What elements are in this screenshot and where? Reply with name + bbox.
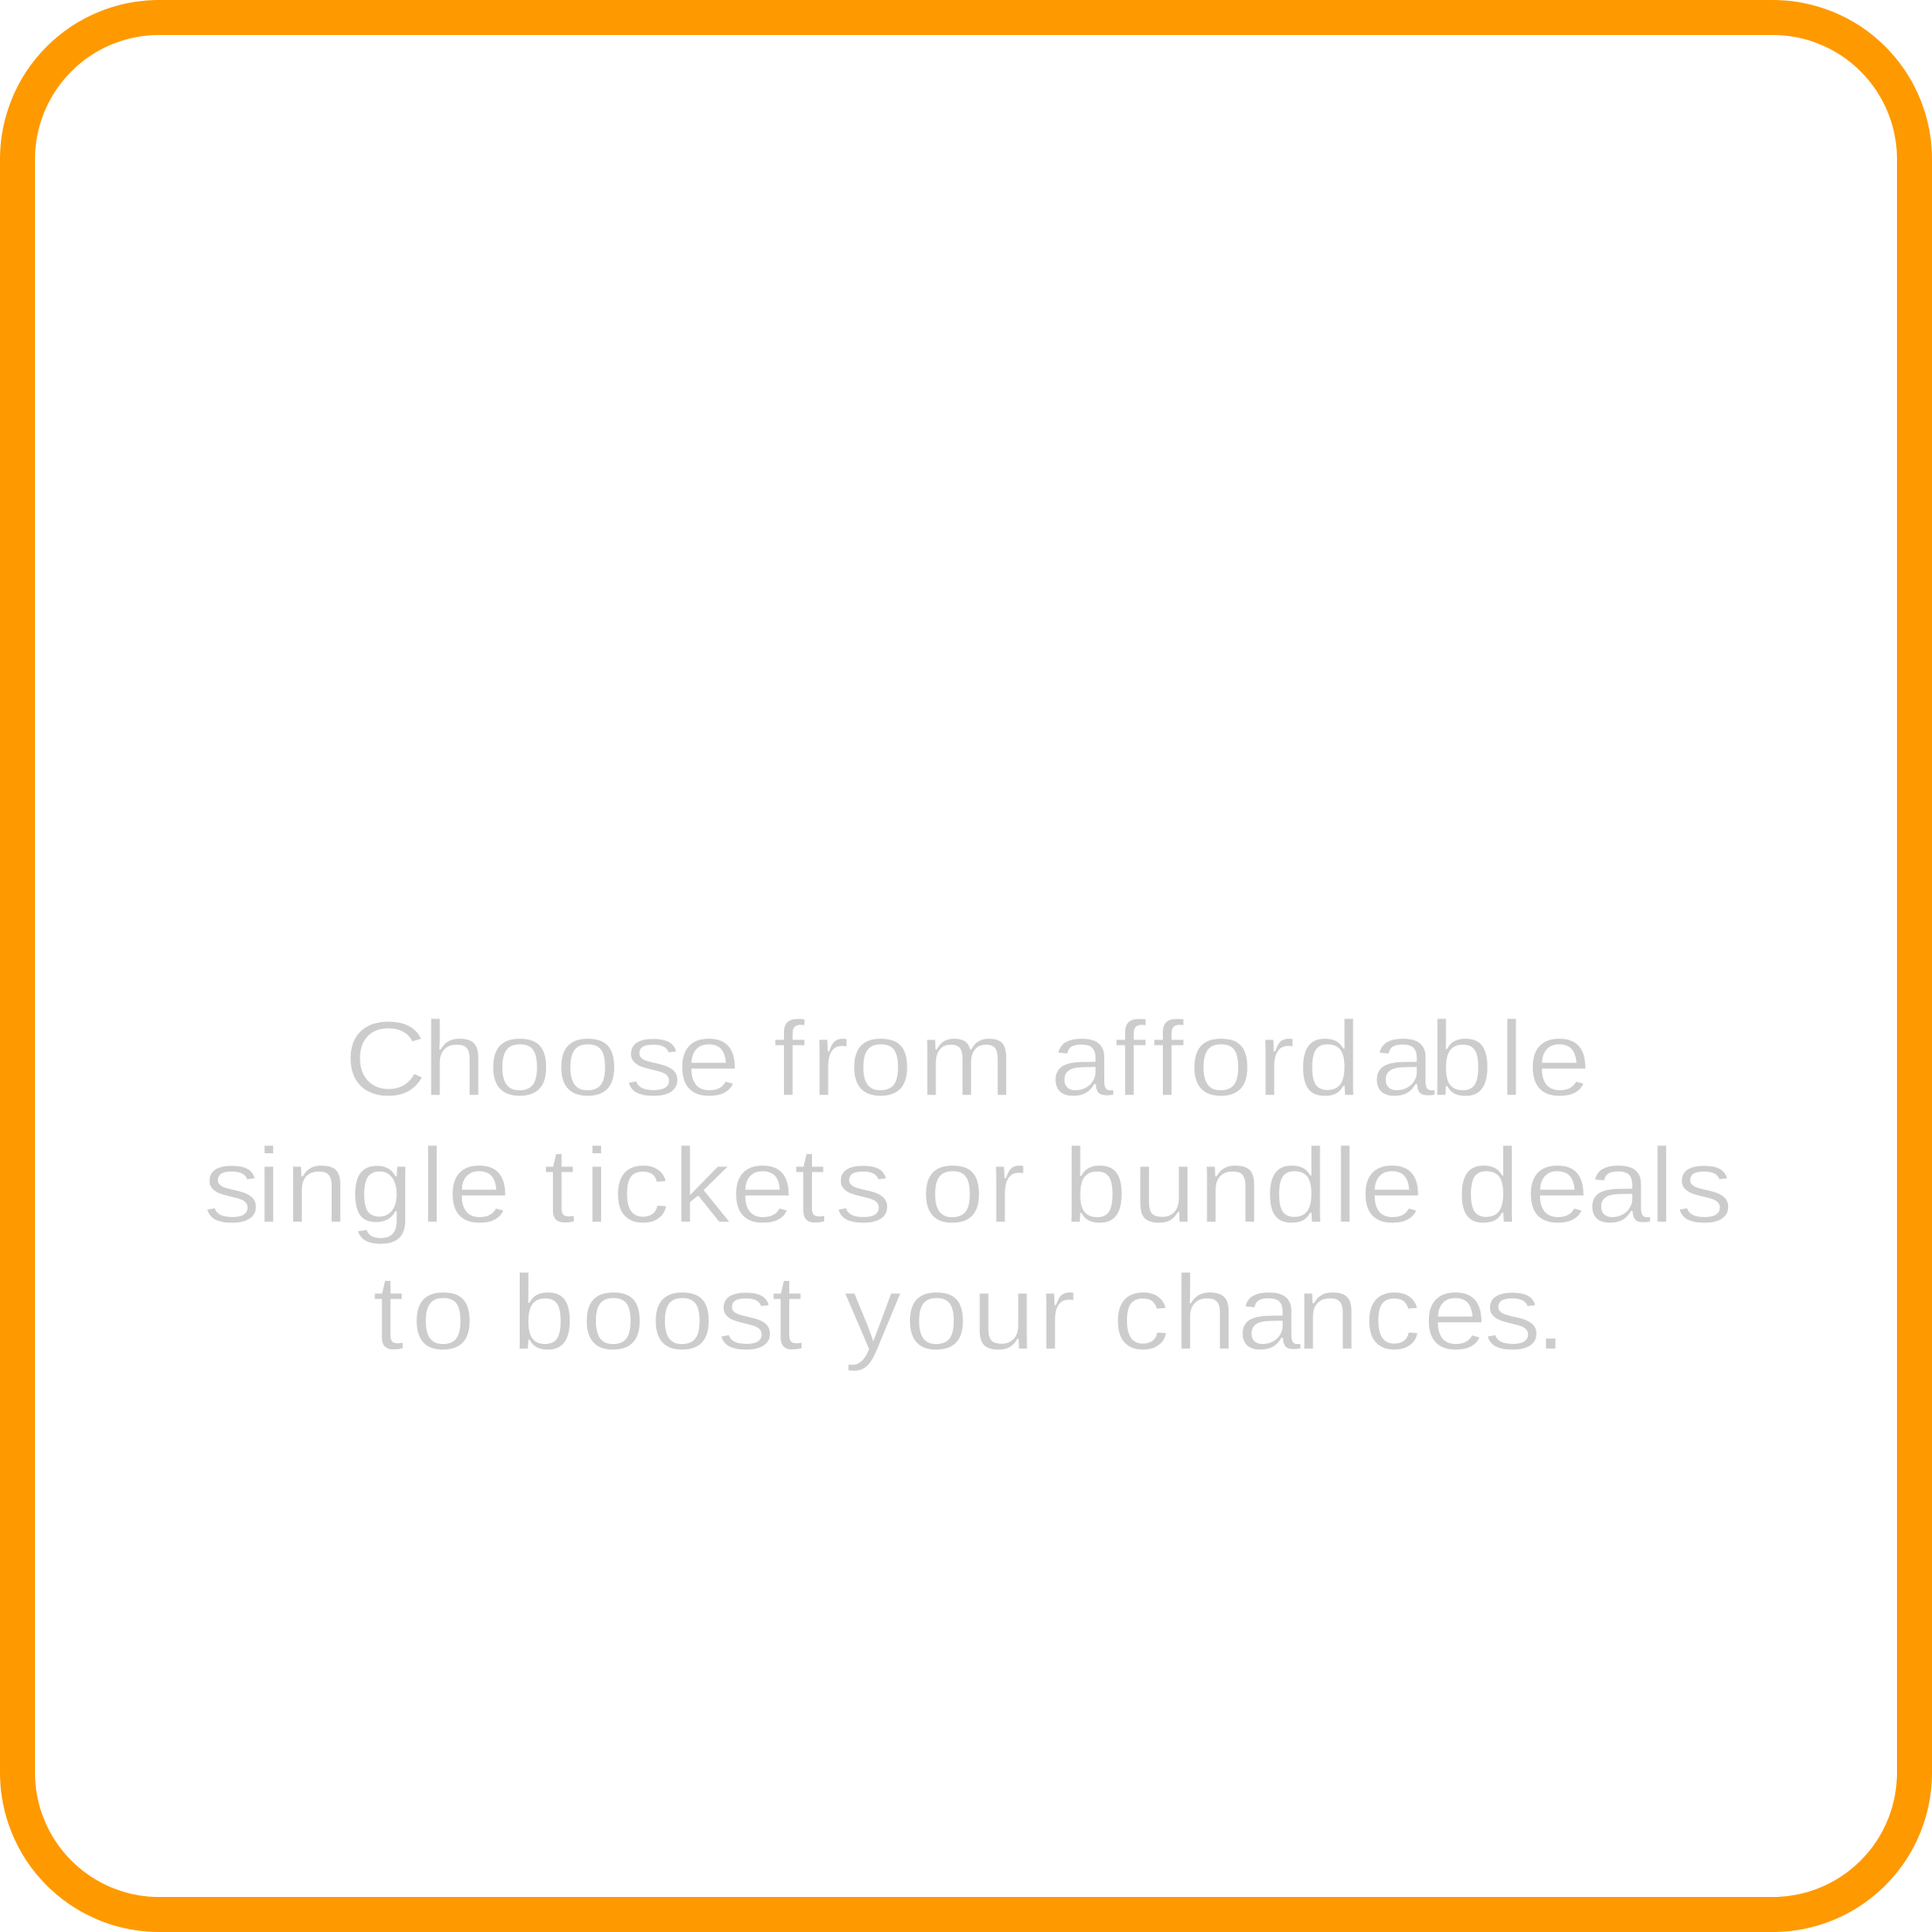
text block: description: to [373,1253,475,1372]
text block: description: chances. [1112,1253,1567,1372]
text block: description: Choose [344,999,741,1118]
text block: description: bundle [1063,1126,1424,1245]
text block: description [203,999,1733,1372]
text block: description: or [920,1126,1026,1245]
text block: description: deals [1456,1126,1733,1245]
text block: description: from [773,999,1015,1118]
text block: description: affordable [1050,999,1592,1118]
text block: description: your [844,1253,1076,1372]
text block: description: boost [511,1253,803,1372]
text block: description: single [203,1126,511,1245]
text block: description: tickets [543,1126,892,1245]
